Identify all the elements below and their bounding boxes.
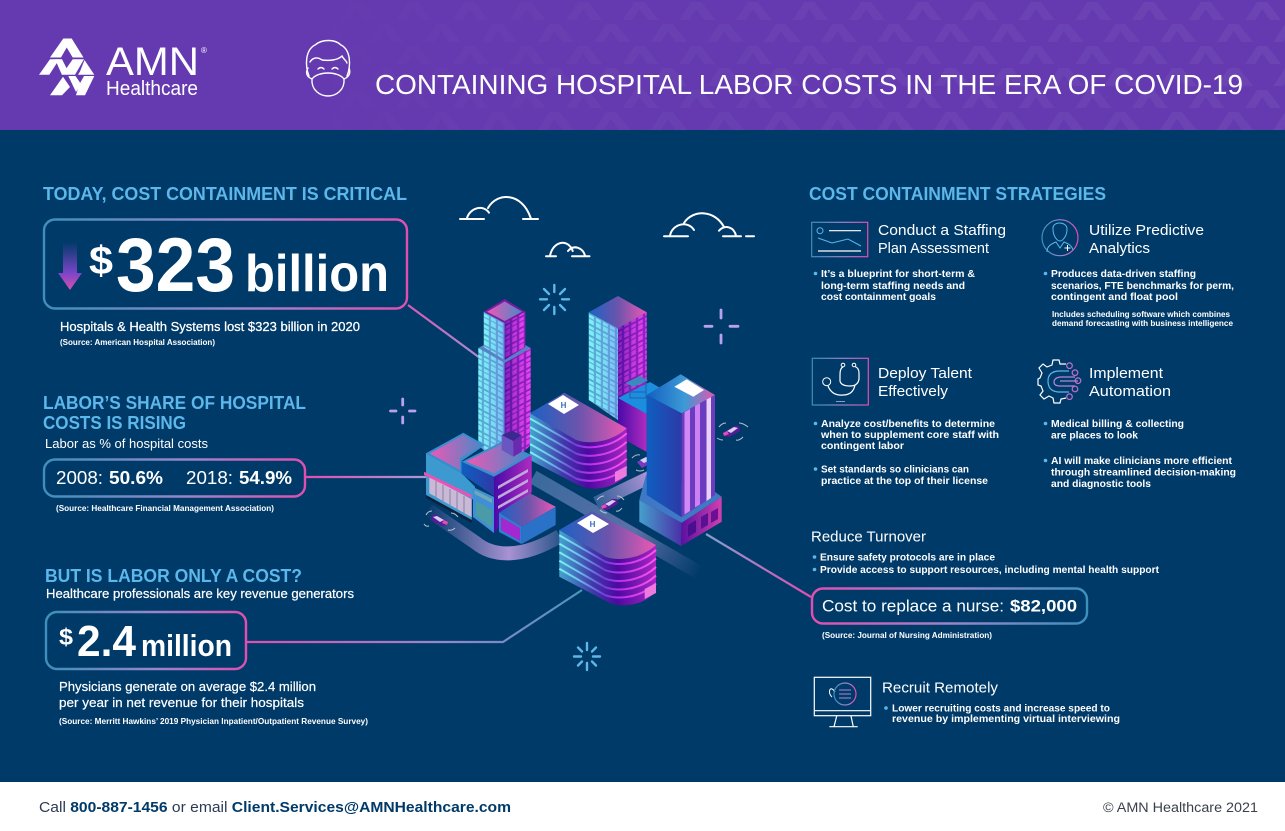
entrance wall <box>473 487 494 533</box>
garage block <box>499 493 556 527</box>
callout box <box>46 612 246 669</box>
stats: 50.6% <box>109 468 163 488</box>
bullet text: It’s a blueprint for short-term & <box>821 269 975 280</box>
heading: LABOR’S SHARE OF HOSPITAL <box>43 392 306 413</box>
heading: TODAY, COST CONTAINMENT IS CRITICAL <box>43 183 407 204</box>
stat: 2.4 million <box>59 617 232 666</box>
heading: Recruit Remotely <box>882 680 998 697</box>
strategy: reduce turnover <box>811 528 1160 640</box>
copyright: © AMN Healthcare 2021 <box>1103 800 1258 815</box>
strategy: staffing plan <box>812 222 1006 303</box>
source: (Source: Healthcare Financial Management Association) <box>56 504 274 513</box>
icon: face with mask <box>307 40 350 96</box>
bullet text: are places to look <box>1051 430 1138 442</box>
description: Hospitals & Health Systems lost $323 billion in 2020 <box>60 320 360 334</box>
bullet text: Set standards so clinicians can <box>821 464 969 476</box>
icon: gear circuit <box>1038 360 1081 403</box>
icon: clouds <box>460 197 754 256</box>
connector lines <box>247 305 811 642</box>
stat: nurse cost: Cost to replace a nurse: <box>822 597 1004 616</box>
footer <box>0 782 1285 831</box>
icon: chart card <box>812 222 868 257</box>
bullet text <box>884 704 1120 725</box>
car: center road <box>597 496 624 513</box>
panel: cost containment <box>43 183 407 347</box>
bullet text: cost containment goals <box>821 292 936 303</box>
description: per year in net revenue for their hospitals <box>59 696 304 710</box>
logo: AMN Healthcare <box>39 38 207 100</box>
bullet text: Provide access to support resources, including mental health support <box>820 565 1160 576</box>
stat: 323 billion: 323 <box>116 223 235 308</box>
description: Physicians generate on average $2.4 million <box>59 680 316 694</box>
panel: labor revenue <box>45 565 368 726</box>
bullet text: through streamlined decision-making <box>1051 468 1236 478</box>
illustration: isometric city <box>424 296 748 605</box>
bullet text: revenue by implementing virtual interviewing <box>892 714 1120 725</box>
heading: Effectively <box>878 383 949 400</box>
stat: 2.4 million: 2.4 <box>77 617 137 666</box>
heading <box>1089 365 1171 400</box>
helipad sign: H <box>590 520 596 529</box>
logo: AMN Healthcare: ® <box>201 46 207 55</box>
car: rear road <box>632 455 652 471</box>
icon: down arrow <box>58 242 82 290</box>
heading <box>43 392 306 433</box>
logo: AMN Healthcare: Healthcare <box>106 78 198 100</box>
heading: BUT IS LABOR ONLY A COST? <box>45 565 302 586</box>
bullet text: Ensure safety protocols are in place <box>820 553 995 564</box>
car: right road <box>717 423 748 440</box>
icon: sparkles <box>390 285 738 670</box>
building: left tower <box>478 299 531 470</box>
car: left road <box>424 511 458 530</box>
heading: Automation <box>1089 383 1171 400</box>
rooftop unit <box>502 435 513 457</box>
callout box <box>812 588 1087 624</box>
bullet text: long-term staffing needs and <box>821 281 965 292</box>
icon: clinician <box>1042 220 1078 256</box>
bullet text: when to supplement core staff with <box>820 430 999 441</box>
bullet text: Medical billing & collecting <box>1051 419 1184 430</box>
callout box <box>44 460 305 496</box>
stats: 2008: <box>56 468 103 488</box>
note <box>1052 310 1234 328</box>
building: rear tower <box>589 296 647 420</box>
bullet text: and diagnostic tools <box>1051 479 1151 490</box>
wordmark: AMN <box>106 40 199 84</box>
heading: Deploy Talent <box>878 365 973 382</box>
heading: Utilize Predictive <box>1089 222 1204 239</box>
heading: Reduce Turnover <box>811 528 926 546</box>
building: upper rounded <box>530 393 627 489</box>
bullet text: contingent and float pool <box>1051 292 1178 303</box>
strategy: automation <box>1038 360 1236 490</box>
panel: strategies heading: COST CONTAINMENT STRATEGIES <box>809 183 1106 204</box>
bullet text <box>1044 419 1236 490</box>
stats <box>56 468 292 488</box>
note: Includes scheduling software which combines <box>1052 310 1231 319</box>
building: low connector <box>618 376 662 452</box>
building: hospital complex <box>424 431 556 544</box>
source: (Source: American Hospital Association) <box>60 338 215 347</box>
heading: COSTS IS RISING <box>43 412 186 433</box>
bullet text: Lower recruiting costs and increase speed to <box>892 704 1110 715</box>
heading: Conduct a Staffing <box>878 222 1006 239</box>
bullet text <box>813 553 1160 576</box>
bullet text: AI will make clinicians more efficient <box>1051 456 1233 467</box>
strategy: recruit remotely <box>814 677 1120 727</box>
callout box <box>44 220 407 308</box>
subheading: Labor as % of hospital costs <box>45 436 208 451</box>
bullet text <box>814 419 999 487</box>
description <box>59 680 316 710</box>
bullet text: practice at the top of their license <box>821 476 988 487</box>
heading: Analytics <box>1089 240 1150 257</box>
heading <box>878 222 1006 257</box>
heading <box>878 365 973 400</box>
bullet text <box>814 269 975 303</box>
bullet text: Produces data-driven staffing <box>1051 269 1196 280</box>
stat: 323 billion: $ <box>89 239 113 283</box>
contact line: Call 800-887-1456 or email Client.Services@AMNHealthcare.com <box>39 800 511 816</box>
title: CONTAINING HOSPITAL LABOR COSTS IN THE ERA OF COVID-19 <box>375 69 1243 100</box>
central block <box>462 462 494 496</box>
bullet text: contingent labor <box>821 441 904 452</box>
bullet text <box>1044 269 1234 303</box>
note: demand forecasting with business intelligence <box>1052 319 1234 328</box>
stats: 2018: <box>186 468 233 488</box>
stat: nurse cost: $82,000 <box>1010 597 1077 616</box>
bullet text: scenarios, FTE benchmarks for perm, <box>1051 281 1234 292</box>
strategy: deploy talent <box>812 358 999 487</box>
left wing <box>426 453 475 520</box>
strategy: predictive analytics <box>1042 220 1234 328</box>
source: (Source: Journal of Nursing Administration) <box>822 631 992 640</box>
building: right tall tower <box>639 374 722 546</box>
stat: 323 billion <box>89 223 389 308</box>
roads <box>428 477 700 573</box>
stat: 2.4 million: million <box>141 628 232 663</box>
heading: Implement <box>1089 365 1164 382</box>
heading <box>1089 222 1204 257</box>
icon: stethoscope monitor <box>812 358 868 405</box>
source: (Source: Merritt Hawkins’ 2019 Physician Inpatient/Outpatient Revenue Survey) <box>59 717 368 726</box>
subheading: Healthcare professionals are key revenue generators <box>46 587 354 601</box>
icon: monitor chat <box>814 677 871 727</box>
panel: labor share <box>43 392 306 513</box>
heading: Plan Assessment <box>878 240 990 257</box>
stat: 323 billion: billion <box>245 245 389 303</box>
building: lower rounded <box>559 511 656 605</box>
stats: 54.9% <box>239 468 292 488</box>
helipad sign: H <box>561 401 567 410</box>
header band <box>0 0 1285 130</box>
stat: 2.4 million: $ <box>59 624 73 650</box>
bullet text: Analyze cost/benefits to determine <box>821 419 995 430</box>
